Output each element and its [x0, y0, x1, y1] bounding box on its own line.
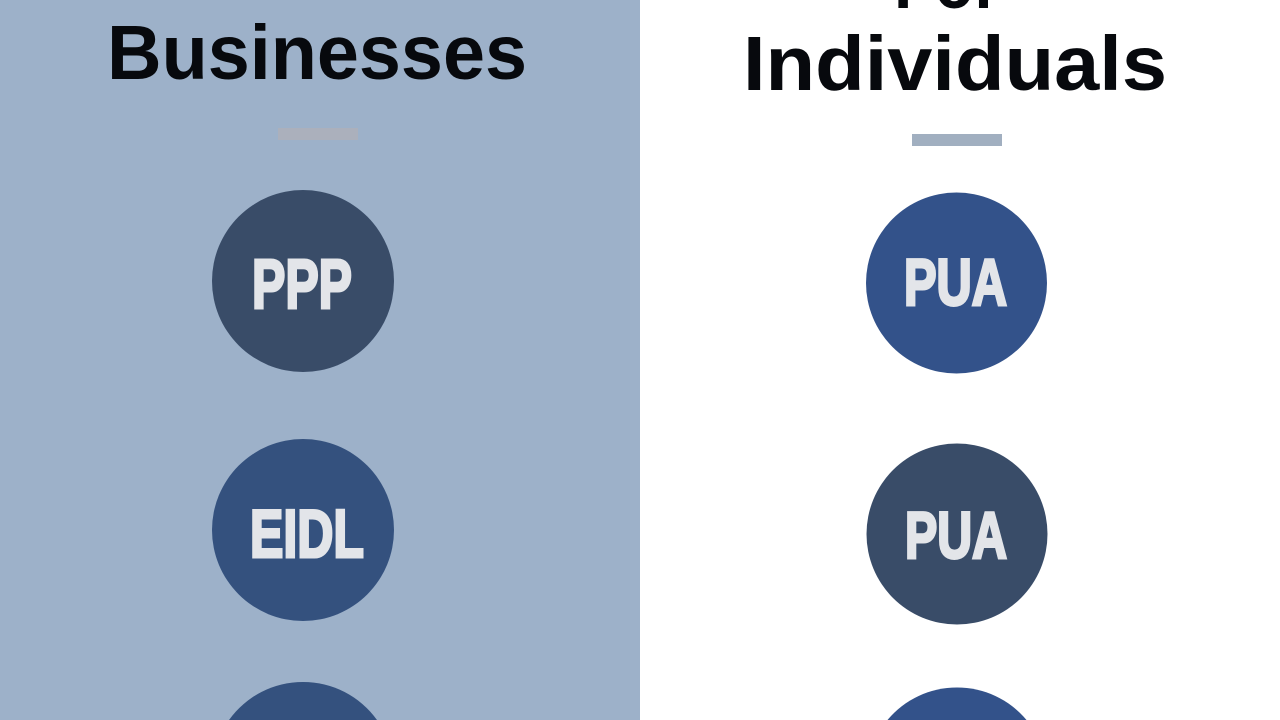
panel background	[0, 0, 640, 720]
badge: EIDL: EIDL	[250, 496, 364, 572]
badge: EIDL	[212, 439, 394, 621]
accent bar	[912, 134, 1002, 146]
accent bar	[278, 128, 358, 140]
heading: Businesses: Businesses	[107, 10, 527, 96]
badge: PPP: PPP	[252, 245, 352, 323]
badge: PUA: PUA	[904, 245, 1007, 319]
badge: PUA second	[866, 444, 1048, 624]
badge: cropped third circle	[888, 687, 1026, 720]
panel: for individuals	[743, 0, 1167, 720]
badge: PUA second: PUA	[905, 498, 1007, 572]
badge: cropped third circle	[229, 682, 377, 720]
badge: PUA	[866, 192, 1047, 374]
heading: Individuals: Individuals	[743, 21, 1167, 107]
badge: PPP	[212, 190, 394, 372]
panel: for businesses	[0, 0, 640, 720]
